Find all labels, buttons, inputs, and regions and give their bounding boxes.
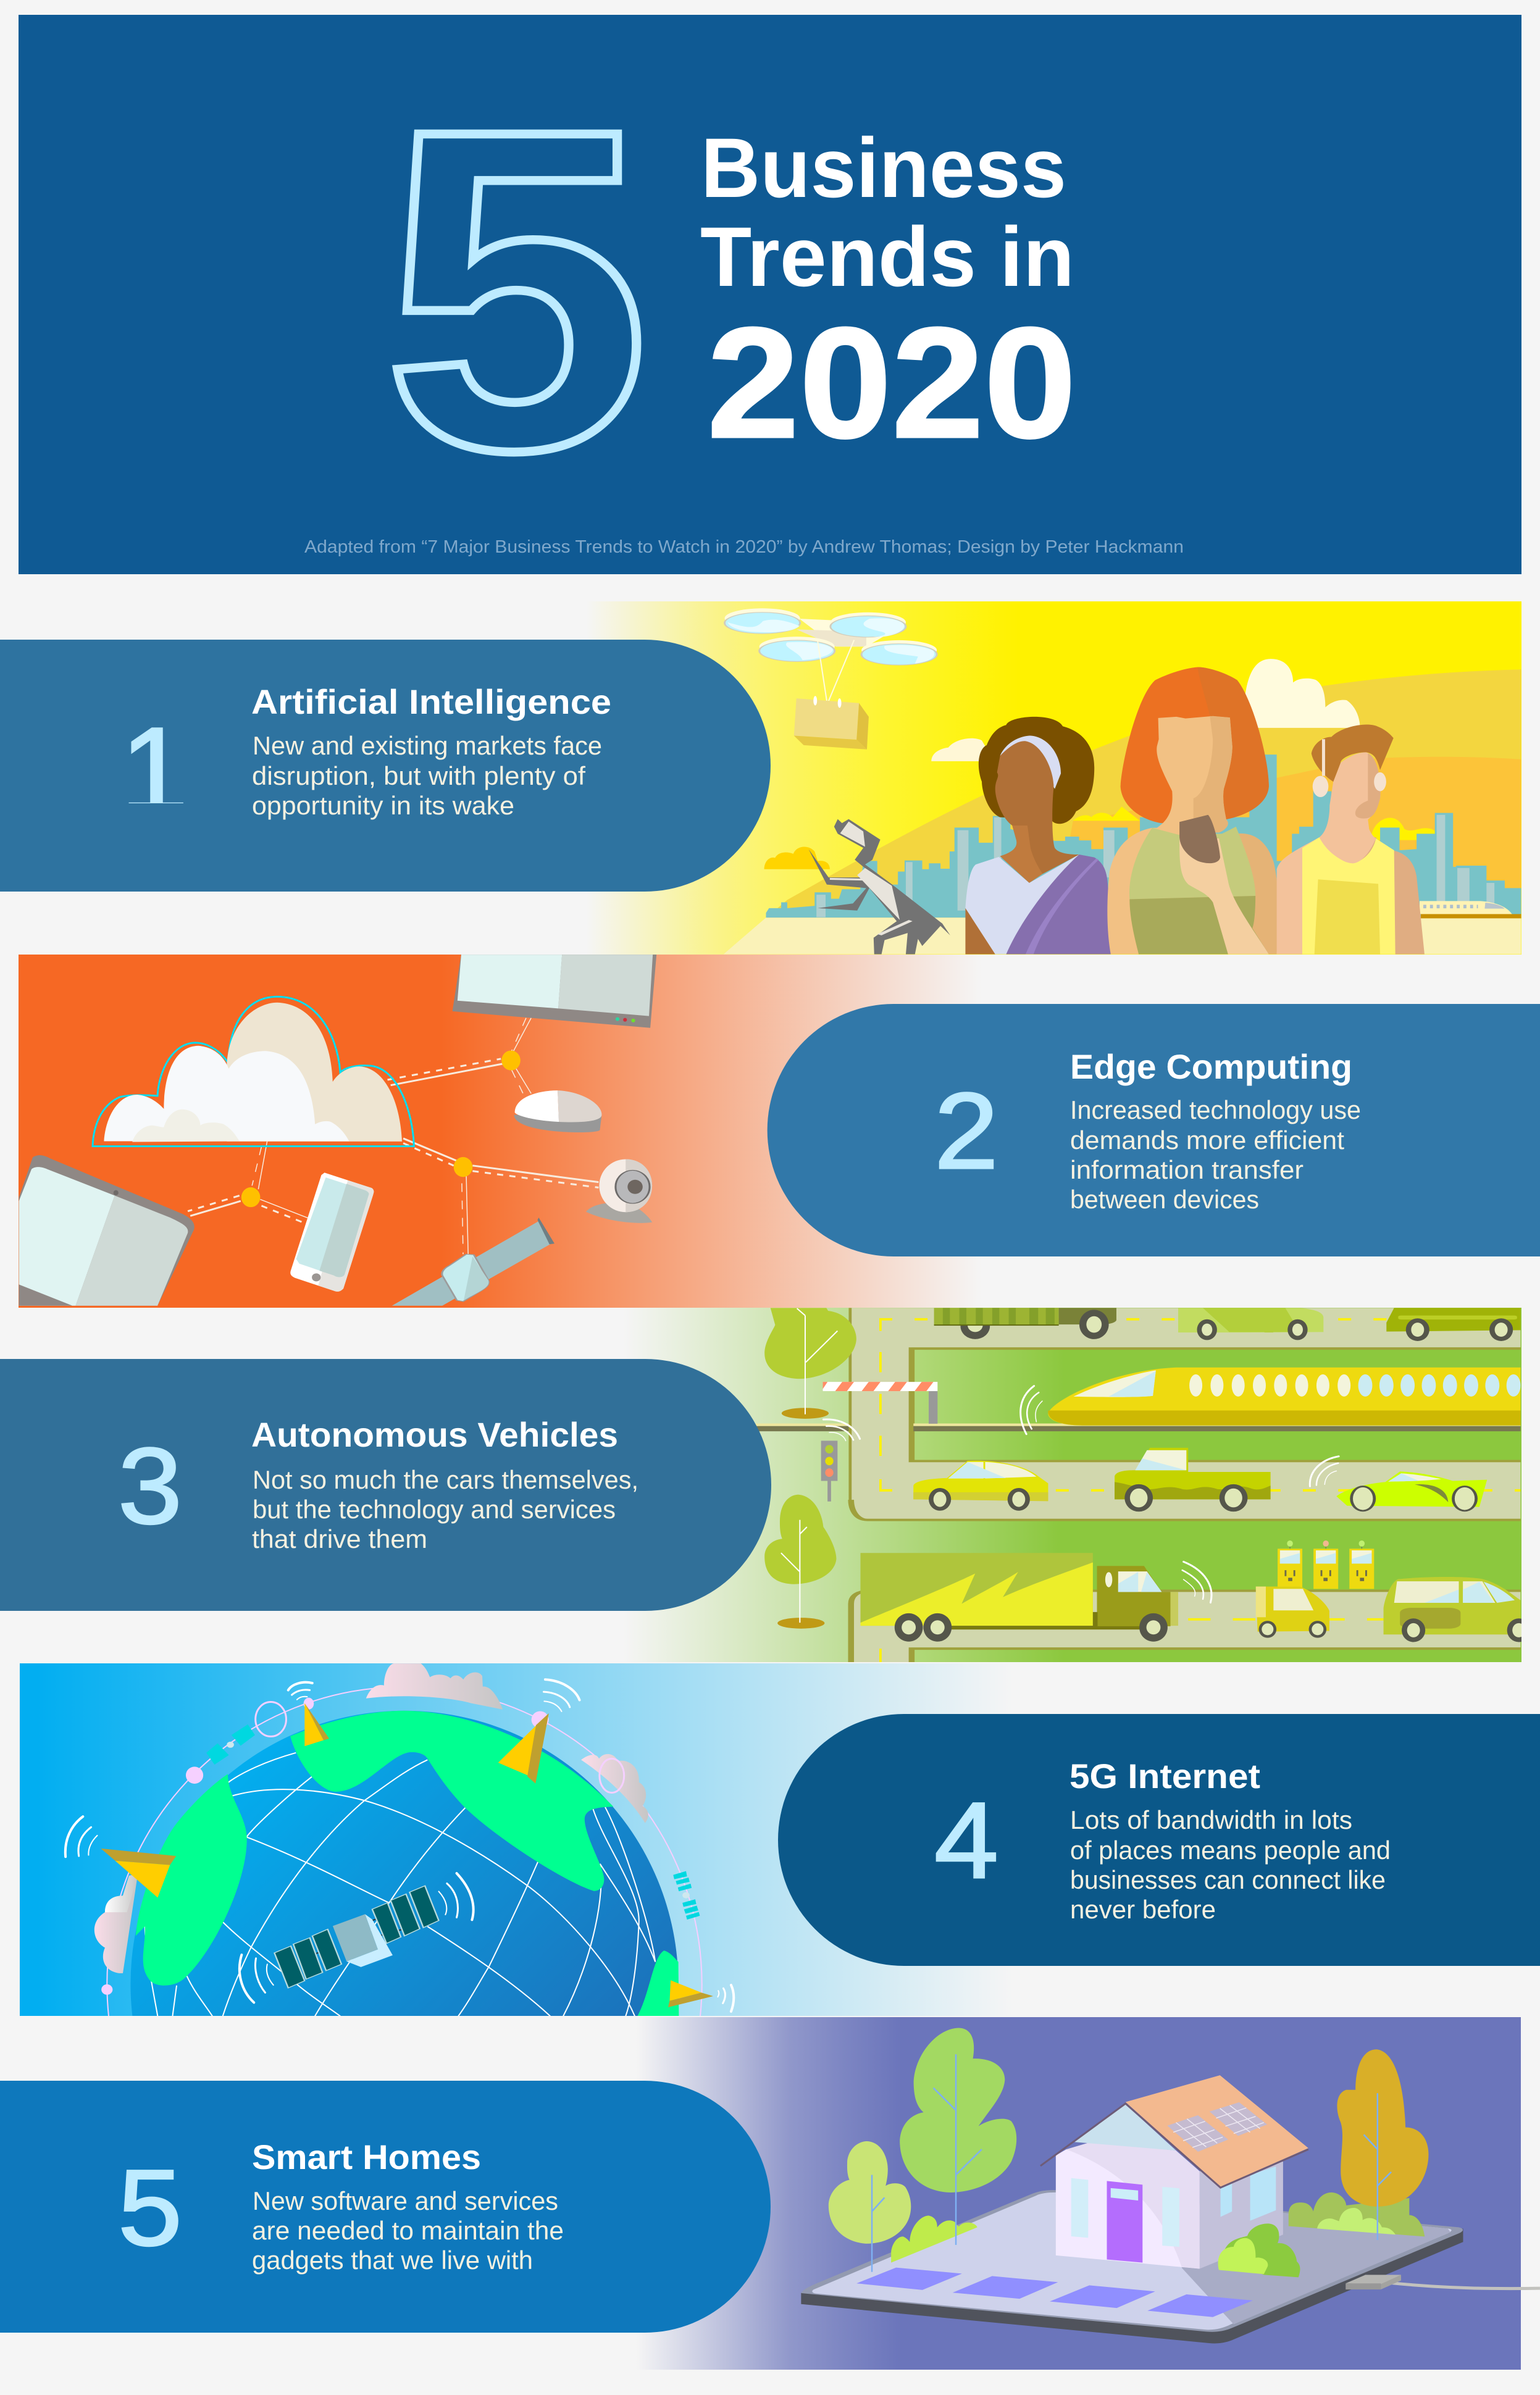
description: demands more efficient: [1070, 1126, 1344, 1155]
panel: 5G internet: [20, 1663, 1540, 2282]
description: opportunity in its wake: [252, 791, 514, 820]
clouds: [94, 1663, 648, 1973]
title: 2020: [707, 295, 1076, 471]
description: New software and services: [253, 2186, 558, 2215]
source credit: Adapted from “7 Major Business Trends to Watch in 2020” by Andrew Thomas; Design by Peter Hackmann: [304, 537, 1184, 557]
illustration: smart home on tablet: [801, 2028, 1540, 2343]
pill: smart homes text: [0, 2081, 771, 2333]
panel: edge computing: [19, 954, 1540, 1308]
description: gadgets that we live with: [252, 2246, 533, 2275]
heading: Smart Homes: [252, 2138, 481, 2176]
description: between devices: [1070, 1185, 1259, 1214]
title: Trends in: [700, 210, 1074, 304]
floor tiles: [856, 2268, 1253, 2317]
road markings: [879, 1319, 1521, 1662]
description: Increased technology use: [1070, 1095, 1361, 1124]
heading: Autonomous Vehicles: [251, 1415, 618, 1454]
top truck: [934, 1308, 1116, 1339]
panel: smart homes: [0, 2017, 1540, 2370]
title: Business: [701, 121, 1066, 215]
orbit: [107, 1687, 702, 2282]
transmitter triangles: [101, 1703, 713, 2007]
icon: monitor: [453, 954, 656, 1028]
illustration: roads and vehicles: [617, 1308, 1531, 1663]
yellow car: [913, 1461, 1048, 1511]
pill: 5G internet text: [778, 1714, 1540, 1966]
description: never before: [1070, 1895, 1216, 1924]
description: businesses can connect like: [1070, 1865, 1386, 1894]
train: [1048, 1368, 1521, 1426]
trees: [764, 1308, 856, 1629]
plug and cable: [1345, 2275, 1540, 2289]
charging stations: [1278, 1540, 1374, 1589]
description: Lots of bandwidth in lots: [1070, 1805, 1352, 1834]
sports car: [1336, 1471, 1487, 1511]
illustration: globe and satellites: [20, 1663, 1521, 2282]
icon: tablet: [19, 1155, 195, 1306]
number 3: 3: [118, 1426, 182, 1547]
orbit markers: [101, 1698, 700, 1995]
description: [252, 731, 602, 820]
small van: [1256, 1587, 1329, 1638]
number 4: 4: [934, 1781, 998, 1901]
origami robot: [808, 819, 950, 955]
satellite: [274, 1886, 439, 1988]
globe grid lines: [145, 1753, 655, 2017]
pickup: [1115, 1448, 1271, 1511]
front bush: [1218, 2223, 1300, 2277]
bushes: [891, 2192, 1425, 2263]
illustration: people, drone, robot and city: [587, 601, 1521, 955]
signal waves: [65, 1679, 734, 2012]
description: are needed to maintain the: [252, 2216, 564, 2245]
pill: edge computing text: [768, 1004, 1540, 1256]
heading: 5G Internet: [1069, 1757, 1260, 1795]
connection lines: [188, 1018, 598, 1254]
hills: [724, 669, 1521, 955]
trees: [829, 2028, 1428, 2272]
rail left: [756, 1424, 853, 1426]
description: Not so much the cars themselves,: [253, 1465, 638, 1494]
description: of places means people and: [1070, 1836, 1391, 1865]
description: that drive them: [252, 1524, 427, 1553]
globe: [130, 1711, 679, 2258]
icon: mouse: [514, 1090, 601, 1132]
heading: Artificial Intelligence: [251, 682, 611, 721]
description: [1070, 1095, 1361, 1214]
number 2: 2: [934, 1071, 998, 1192]
house: [1040, 2075, 1308, 2269]
description: New and existing markets face: [253, 731, 602, 760]
description: disruption, but with plenty of: [252, 761, 585, 790]
rail right: [913, 1424, 1521, 1426]
woman with sari: [965, 717, 1113, 955]
icon: smartwatch: [392, 1218, 554, 1306]
skyline: [766, 816, 1128, 917]
lightning truck: [861, 1553, 1178, 1642]
woman with phone: [1107, 667, 1279, 955]
pill: artificial intelligence text: [0, 640, 771, 892]
illustration: cloud and connected devices: [19, 955, 961, 1308]
heading: Edge Computing: [1070, 1047, 1352, 1086]
panel: autonomous vehicles: [0, 1308, 1531, 1663]
icon: cloud: [93, 997, 414, 1146]
signal waves: [823, 1386, 1339, 1603]
icon: webcam: [586, 1159, 652, 1223]
road network: [848, 1308, 1521, 1663]
panel: artificial intelligence: [0, 601, 1521, 955]
suv: [1384, 1577, 1531, 1642]
description: [252, 2186, 564, 2275]
number 1: 1: [120, 702, 188, 838]
traffic light: [821, 1440, 837, 1502]
man with headset: [1277, 725, 1425, 955]
description: [252, 1465, 638, 1553]
continents: [136, 1711, 679, 2017]
icon: phone: [290, 1172, 374, 1292]
panel: header: [19, 15, 1521, 574]
drone: [725, 608, 937, 750]
number 5: 5: [118, 2148, 182, 2268]
description: [1070, 1805, 1391, 1924]
pill: autonomous vehicles text: [0, 1359, 771, 1611]
train: [1420, 901, 1512, 914]
title: [700, 121, 1076, 471]
barrier: [823, 1382, 937, 1424]
top cars: [1178, 1308, 1521, 1341]
network nodes: [241, 1050, 521, 1207]
description: information transfer: [1070, 1155, 1304, 1184]
tablet platform: [801, 2190, 1463, 2343]
description: but the technology and services: [253, 1495, 616, 1524]
outlined numeral 5: 5: [383, 35, 650, 545]
